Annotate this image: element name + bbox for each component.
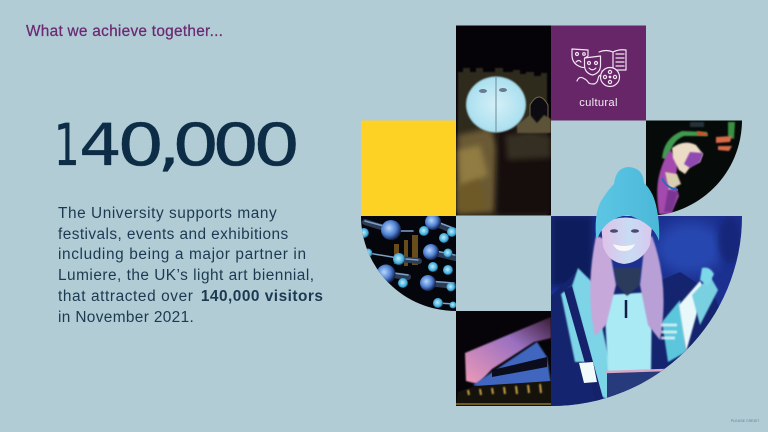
body text: including being a major partner in <box>58 246 307 263</box>
icon: masks, book and film reel <box>572 49 626 86</box>
hair <box>590 236 616 336</box>
panel: dog photo <box>646 120 742 216</box>
body text: The University supports many <box>58 205 277 222</box>
panel: light orbs photo <box>359 214 457 311</box>
big number: 0 <box>212 112 260 179</box>
badge text <box>661 325 677 338</box>
panel: cultural <box>551 26 646 120</box>
face <box>601 217 652 264</box>
big number: , <box>157 112 181 179</box>
body text: festivals, events and exhibitions <box>58 226 289 243</box>
big number <box>54 112 301 179</box>
body text: in November 2021. <box>58 308 194 326</box>
jacket <box>551 270 720 406</box>
big number: 0 <box>253 112 301 179</box>
big number: 0 <box>117 112 164 179</box>
panel: castle photo <box>456 26 551 223</box>
panel: yellow square <box>361 120 456 216</box>
panel: building photo <box>456 311 551 406</box>
big number: 0 <box>172 112 219 179</box>
body text: Lumiere, the UK’s light art biennial, <box>58 267 315 284</box>
label: cultural: cultural <box>579 97 618 109</box>
tablet <box>607 370 663 398</box>
neck <box>614 268 641 296</box>
image mosaic <box>361 26 742 406</box>
body text <box>58 205 323 326</box>
big number: 1 <box>54 112 79 179</box>
footer credit: PLEASE CREDIT <box>731 419 759 423</box>
body text: that attracted over 140,000 visitors <box>58 288 323 305</box>
hat <box>596 167 659 241</box>
heading: What we achieve together... <box>26 23 223 40</box>
panel: woman photo <box>551 167 742 407</box>
big number: 4 <box>79 112 122 179</box>
